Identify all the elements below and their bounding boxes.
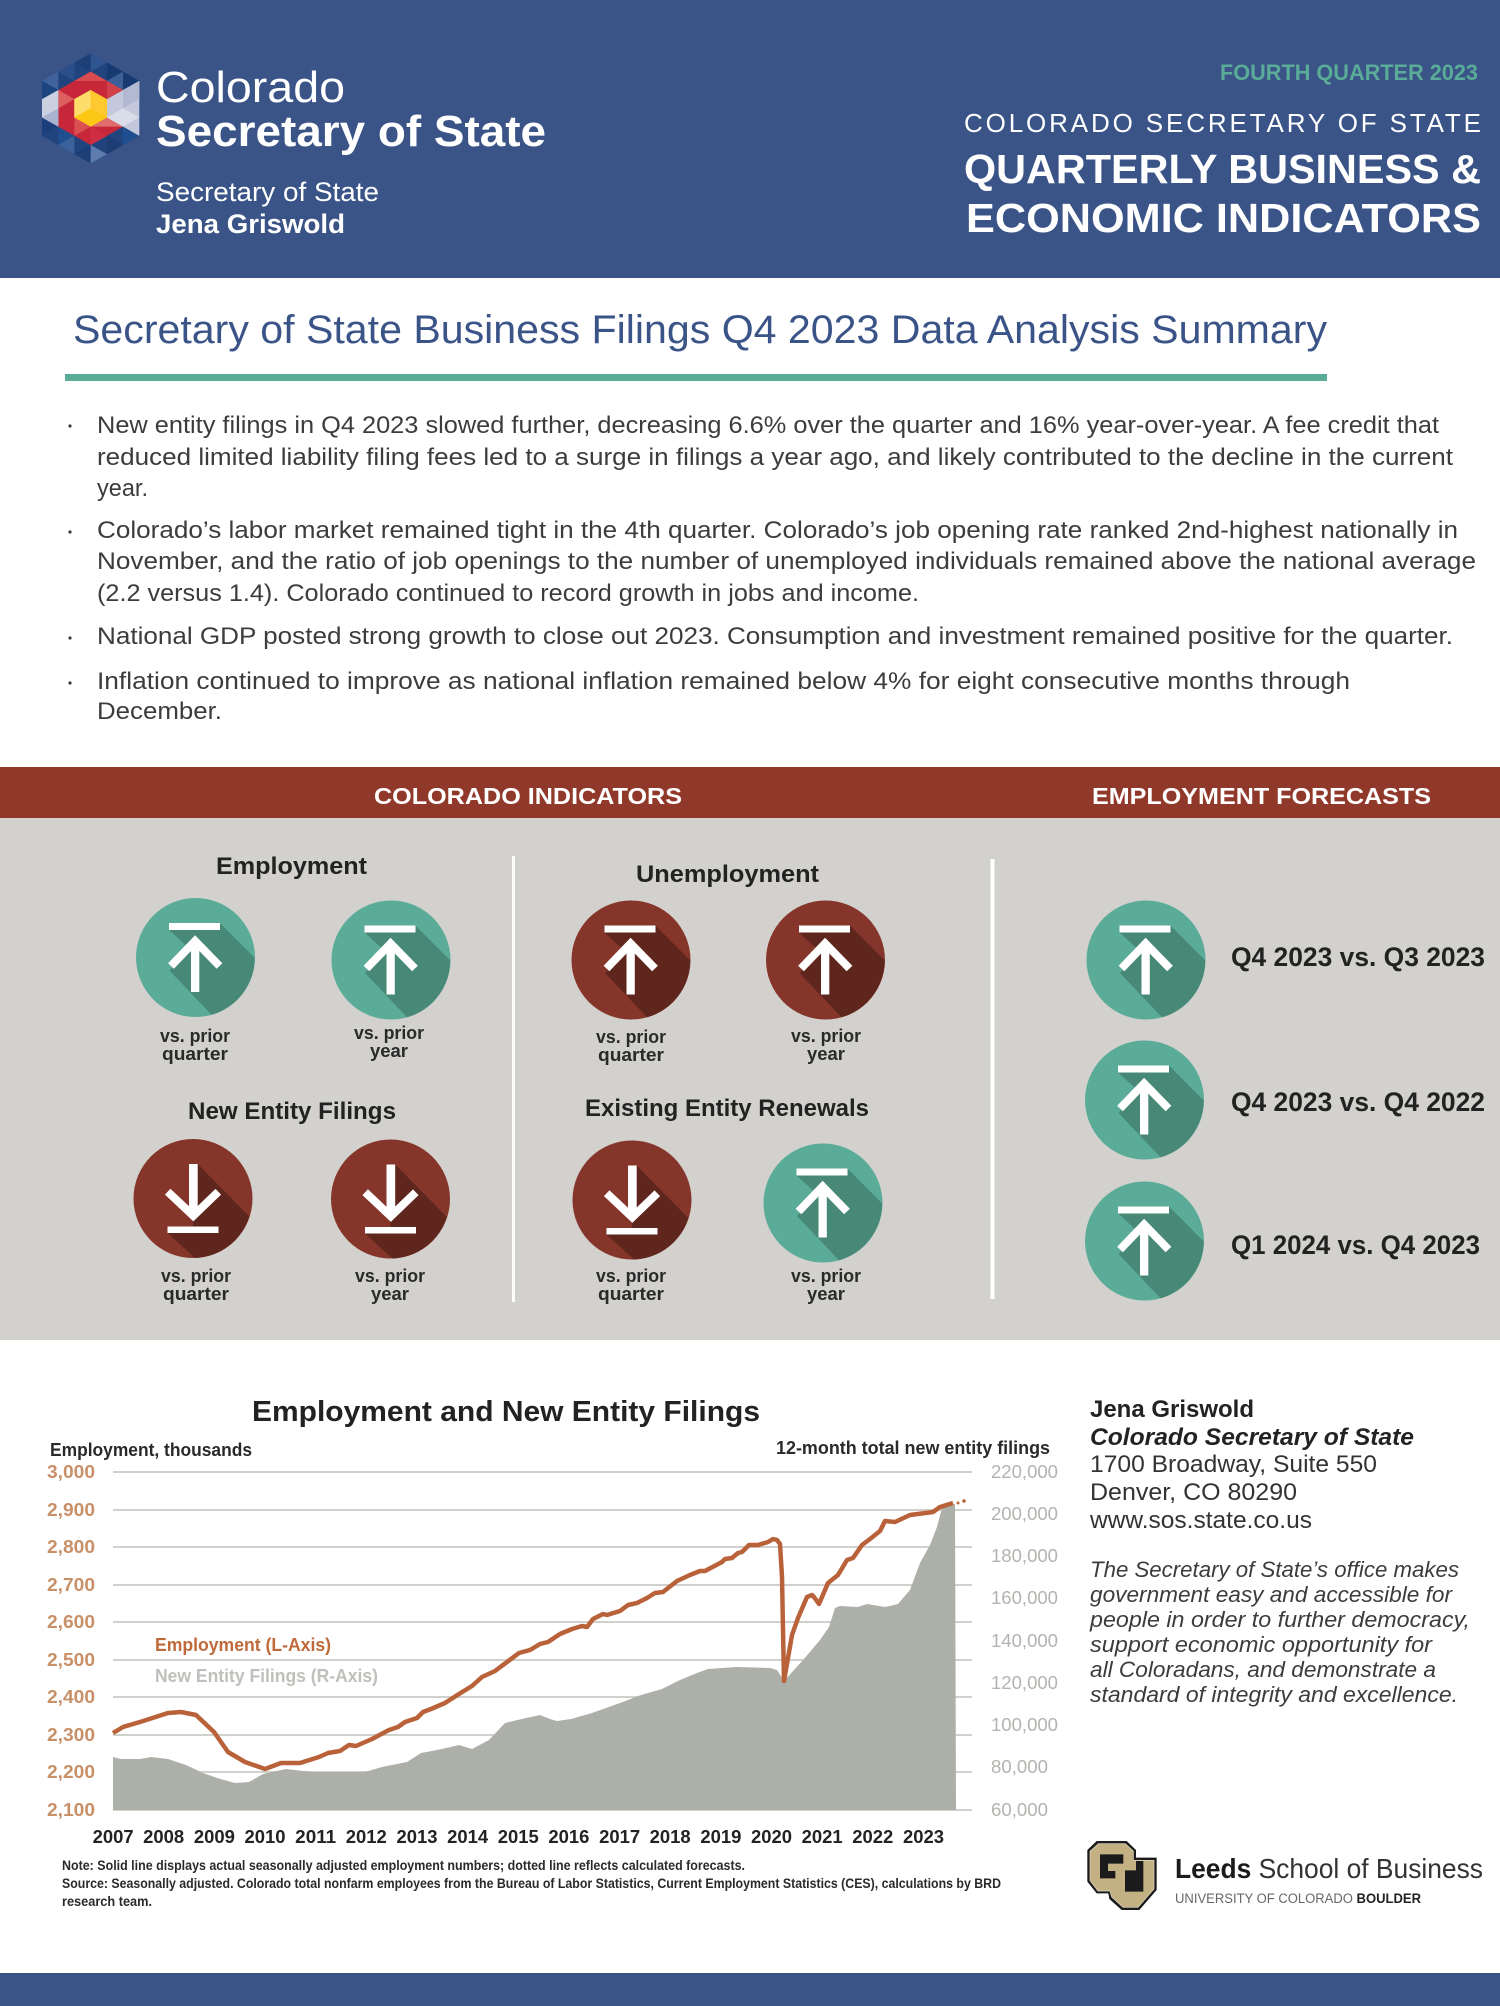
left axis labels: 2,500: [47, 1650, 95, 1670]
mission statement: support economic opportunity for: [1090, 1632, 1434, 1657]
year labels: 2009: [194, 1827, 235, 1847]
right axis labels: 200,000: [991, 1504, 1058, 1524]
contact block: [1089, 1396, 1414, 1534]
icon: Colorado hexagon logo: [42, 53, 139, 163]
contact block: Denver, CO 80290: [1090, 1479, 1297, 1506]
indicator group: existing entity renewals: vs. prior: [791, 1266, 861, 1286]
indicator group: new entity filings: vs. prior: [161, 1266, 231, 1286]
bullet list summary: reduced limited liability filing fees led to a surge in filings a year ago, and likely contributed to the decline in the current: [97, 444, 1453, 471]
Leeds wordmark: [1175, 1853, 1483, 1906]
indicator group: new entity filings: vs. prior: [355, 1266, 425, 1286]
mission statement: standard of integrity and excellence.: [1090, 1682, 1458, 1707]
left axis labels: 2,400: [47, 1687, 95, 1707]
report title: ECONOMIC INDICATORS: [966, 195, 1481, 241]
contact block: www.sos.state.co.us: [1089, 1507, 1312, 1534]
year labels: 2016: [548, 1827, 589, 1847]
chart notes: research team.: [62, 1894, 152, 1909]
summary heading: [65, 308, 1327, 381]
year labels: 2015: [498, 1827, 539, 1847]
contact block: Jena Griswold: [1090, 1396, 1254, 1423]
indicator group: existing entity renewals: Existing Entity Renewals: [585, 1095, 869, 1122]
officeholder name: Jena Griswold: [156, 209, 345, 239]
left axis labels: 3,000: [47, 1462, 95, 1482]
year labels: 2017: [599, 1827, 640, 1847]
indicator group: unemployment: vs. prior: [791, 1026, 861, 1046]
year labels: 2022: [852, 1827, 893, 1847]
bullet list summary: [68, 412, 1476, 725]
heading: employment forecasts: EMPLOYMENT FORECASTS: [1092, 783, 1431, 809]
area: new entity filings: [113, 1504, 956, 1810]
Leeds wordmark: Leeds School of Business: [1175, 1853, 1483, 1884]
contact block: 1700 Broadway, Suite 550: [1090, 1451, 1377, 1478]
right axis labels: 100,000: [991, 1715, 1058, 1735]
right axis labels: 80,000: [991, 1757, 1048, 1777]
legend: [155, 1635, 378, 1686]
left axis labels: 2,200: [47, 1762, 95, 1782]
header band: [0, 0, 1500, 278]
panel: indicators band: [0, 767, 1500, 1340]
forecast: Q1 2024 vs Q4 2023: Q1 2024 vs. Q4 2023: [1231, 1230, 1480, 1260]
year labels: [93, 1827, 944, 1847]
report title: [964, 108, 1481, 241]
right axis labels: 140,000: [991, 1631, 1058, 1651]
indicator group: employment: year: [370, 1041, 408, 1061]
chart title: Employment and New Entity Filings: [252, 1396, 760, 1428]
left axis labels: 2,700: [47, 1575, 95, 1595]
indicator group: existing entity renewals: quarter: [598, 1284, 664, 1304]
year labels: 2019: [700, 1827, 741, 1847]
year labels: 2008: [143, 1827, 184, 1847]
contact block: Colorado Secretary of State: [1090, 1424, 1414, 1451]
indicator group: unemployment: vs. prior: [596, 1027, 666, 1047]
chart notes: Source: Seasonally adjusted. Colorado total nonfarm employees from the Bureau of Labor Statistics, Current Employment Statistics (CES), calculations by BRD: [62, 1876, 1001, 1891]
indicator group: new entity filings: quarter: [163, 1284, 229, 1304]
indicator group: existing entity renewals: year: [807, 1284, 845, 1304]
right axis labels: 120,000: [991, 1673, 1058, 1693]
forecast: Q4 2023 vs Q3 2023: Q4 2023 vs. Q3 2023: [1231, 942, 1485, 972]
indicator group: unemployment: [572, 861, 885, 1065]
bullet list summary: National GDP posted strong growth to close out 2023. Consumption and investment remained positive for the quarter.: [97, 623, 1453, 650]
left axis labels: 2,300: [47, 1725, 95, 1745]
year labels: 2014: [447, 1827, 488, 1847]
bullet list summary: November, and the ratio of job openings to the number of unemployed individuals remained above the national average: [97, 548, 1476, 575]
forecast: Q4 2023 vs Q3 2023: [1086, 900, 1485, 1020]
forecast: Q4 2023 vs Q4 2022: Q4 2023 vs. Q4 2022: [1231, 1087, 1485, 1117]
left axis labels: [47, 1462, 95, 1820]
indicator group: employment: vs. prior: [354, 1023, 424, 1043]
right axis labels: 60,000: [991, 1800, 1048, 1820]
mission statement: government easy and accessible for: [1090, 1582, 1454, 1607]
indicator group: unemployment: year: [807, 1044, 845, 1064]
footer band: [0, 1973, 1500, 2006]
indicator group: employment: vs. prior: [160, 1026, 230, 1046]
left axis labels: 2,600: [47, 1612, 95, 1632]
line: employment: [113, 1499, 966, 1769]
indicator group: unemployment: Unemployment: [636, 861, 819, 888]
right axis labels: 160,000: [991, 1588, 1058, 1608]
axis titles: 12-month total new entity filings: [776, 1438, 1050, 1458]
year labels: 2010: [244, 1827, 286, 1847]
logo wordmark: Secretary of State: [156, 107, 546, 156]
mission statement: [1089, 1557, 1470, 1707]
indicator group: new entity filings: year: [371, 1284, 409, 1304]
indicator group: new entity filings: New Entity Filings: [188, 1098, 396, 1125]
legend: New Entity Filings (R-Axis): [155, 1666, 378, 1686]
right axis labels: 180,000: [991, 1546, 1058, 1566]
year labels: 2018: [650, 1827, 691, 1847]
indicator group: new entity filings: [134, 1098, 450, 1304]
year labels: 2011: [295, 1827, 336, 1847]
legend: Employment (L-Axis): [155, 1635, 331, 1655]
bullet list summary: (2.2 versus 1.4). Colorado continued to record growth in jobs and income.: [97, 580, 919, 607]
report title: COLORADO SECRETARY OF STATE: [964, 108, 1481, 138]
bullet list summary: year.: [97, 475, 148, 502]
logo wordmark: [156, 63, 546, 156]
year labels: 2012: [346, 1827, 387, 1847]
indicator group: employment: Employment: [216, 853, 367, 880]
forecast: Q4 2023 vs Q4 2022: [1085, 1040, 1485, 1160]
report title: QUARTERLY BUSINESS &: [964, 146, 1481, 192]
left axis labels: 2,900: [47, 1500, 95, 1520]
mission statement: The Secretary of State’s office makes: [1090, 1557, 1459, 1582]
left axis labels: 2,100: [47, 1800, 95, 1820]
year labels: 2021: [802, 1827, 843, 1847]
summary heading: Secretary of State Business Filings Q4 2023 Data Analysis Summary: [73, 308, 1327, 352]
bullet list summary: Colorado’s labor market remained tight in the 4th quarter. Colorado’s job opening rate ranked 2nd-highest nationally in: [97, 517, 1458, 544]
right axis labels: [991, 1462, 1058, 1820]
mission statement: all Coloradans, and demonstrate a: [1090, 1657, 1436, 1682]
indicator group: unemployment: quarter: [598, 1045, 664, 1065]
forecast: Q1 2024 vs Q4 2023: [1085, 1182, 1480, 1300]
indicator group: existing entity renewals: [572, 1095, 882, 1304]
year labels: 2007: [93, 1827, 134, 1847]
right axis labels: 220,000: [991, 1462, 1058, 1482]
indicator group: employment: quarter: [162, 1044, 228, 1064]
indicator group: existing entity renewals: vs. prior: [596, 1266, 666, 1286]
chart notes: Note: Solid line displays actual seasonally adjusted employment numbers; dotted line reflects calculated forecasts.: [62, 1858, 745, 1873]
axis titles: [50, 1438, 1050, 1460]
officeholder name: [156, 177, 379, 239]
bullet list summary: Inflation continued to improve as national inflation remained below 4% for eight consecutive months through: [97, 668, 1350, 695]
bullet list summary: New entity filings in Q4 2023 slowed further, decreasing 6.6% over the quarter and 16% year-over-year. A fee credit that: [97, 412, 1439, 439]
officeholder name: Secretary of State: [156, 177, 379, 207]
indicator group: employment: [136, 853, 450, 1064]
bullet list summary: December.: [97, 698, 222, 725]
year labels: 2023: [903, 1827, 944, 1847]
logo wordmark: Colorado: [156, 63, 345, 112]
heading: Colorado indicators: COLORADO INDICATORS: [374, 783, 682, 809]
mission statement: people in order to further democracy,: [1089, 1607, 1470, 1632]
Leeds wordmark: UNIVERSITY OF COLORADO BOULDER: [1175, 1891, 1421, 1906]
chart notes: [62, 1858, 1001, 1909]
year labels: 2013: [396, 1827, 438, 1847]
year labels: 2020: [751, 1827, 792, 1847]
quarter label: FOURTH QUARTER 2023: [1220, 60, 1478, 85]
icon: CU logo: [1087, 1841, 1157, 1910]
left axis labels: 2,800: [47, 1537, 95, 1557]
chart: employment and new entity filings: [47, 1396, 1058, 1909]
axis titles: Employment, thousands: [50, 1440, 252, 1460]
